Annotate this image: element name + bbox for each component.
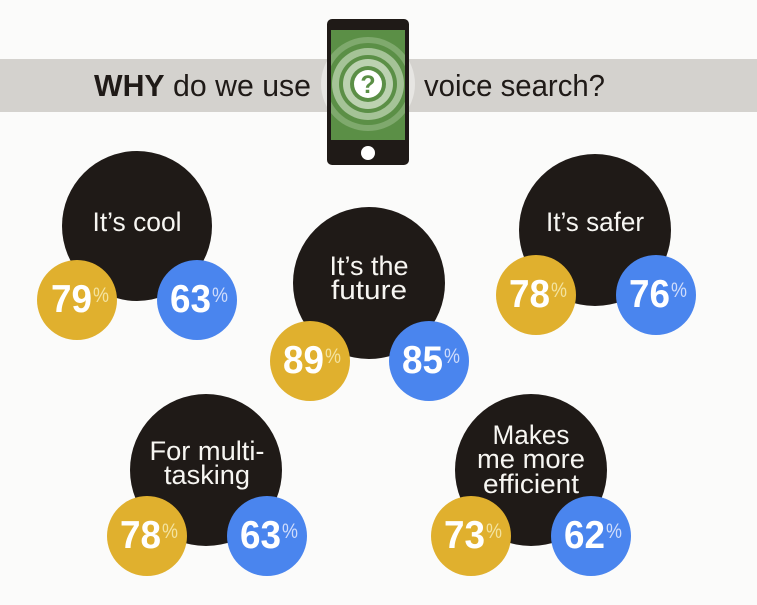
group: It's cool: It’s cool xyxy=(92,207,182,237)
group: For multi-tasking xyxy=(107,394,307,576)
group: It's cool: % xyxy=(212,284,228,307)
group: It's safer: 76 xyxy=(629,273,670,316)
icon: phone with sound rings xyxy=(321,19,415,165)
group: It's the future: 85 xyxy=(402,339,443,382)
group: Makes me more efficient: 62 xyxy=(564,514,605,557)
header band xyxy=(0,59,757,112)
title: left part: WHY do we use xyxy=(94,68,311,103)
group: It's safer: % xyxy=(551,279,567,302)
group: It's the future: future xyxy=(331,275,407,305)
group: It's cool: 79 xyxy=(51,278,92,321)
group: Makes me more efficient xyxy=(431,394,631,576)
group: It's cool: 63 xyxy=(170,278,211,321)
group: It's the future: It’s the xyxy=(330,251,408,281)
group: Makes me more efficient: % xyxy=(606,520,622,543)
icon: phone with sound rings: ? xyxy=(360,71,376,99)
group: Makes me more efficient: 73 xyxy=(444,514,485,557)
group: It's safer: % xyxy=(671,279,687,302)
group: It's cool: % xyxy=(93,284,109,307)
group: Makes me more efficient: Makes xyxy=(492,420,570,450)
group: It's the future: % xyxy=(325,345,341,368)
title: right part: voice search? xyxy=(424,68,605,103)
group: It's safer xyxy=(496,154,696,335)
group: It's cool xyxy=(37,151,237,340)
group: Makes me more efficient: % xyxy=(486,520,502,543)
group: For multi-tasking: % xyxy=(282,520,298,543)
group: For multi-tasking: 78 xyxy=(120,514,161,557)
group: Makes me more efficient: efficient xyxy=(483,469,580,499)
group: It's the future: % xyxy=(444,345,460,368)
group: For multi-tasking: tasking xyxy=(164,460,250,490)
group: For multi-tasking: For multi- xyxy=(150,436,264,466)
group: It's the future xyxy=(270,207,469,401)
group: It's the future: 89 xyxy=(283,339,324,382)
group: For multi-tasking: % xyxy=(162,520,178,543)
group: For multi-tasking: 63 xyxy=(240,514,281,557)
group: Makes me more efficient: me more xyxy=(477,444,585,474)
group: It's safer: It’s safer xyxy=(546,207,644,237)
group: It's safer: 78 xyxy=(509,273,550,316)
